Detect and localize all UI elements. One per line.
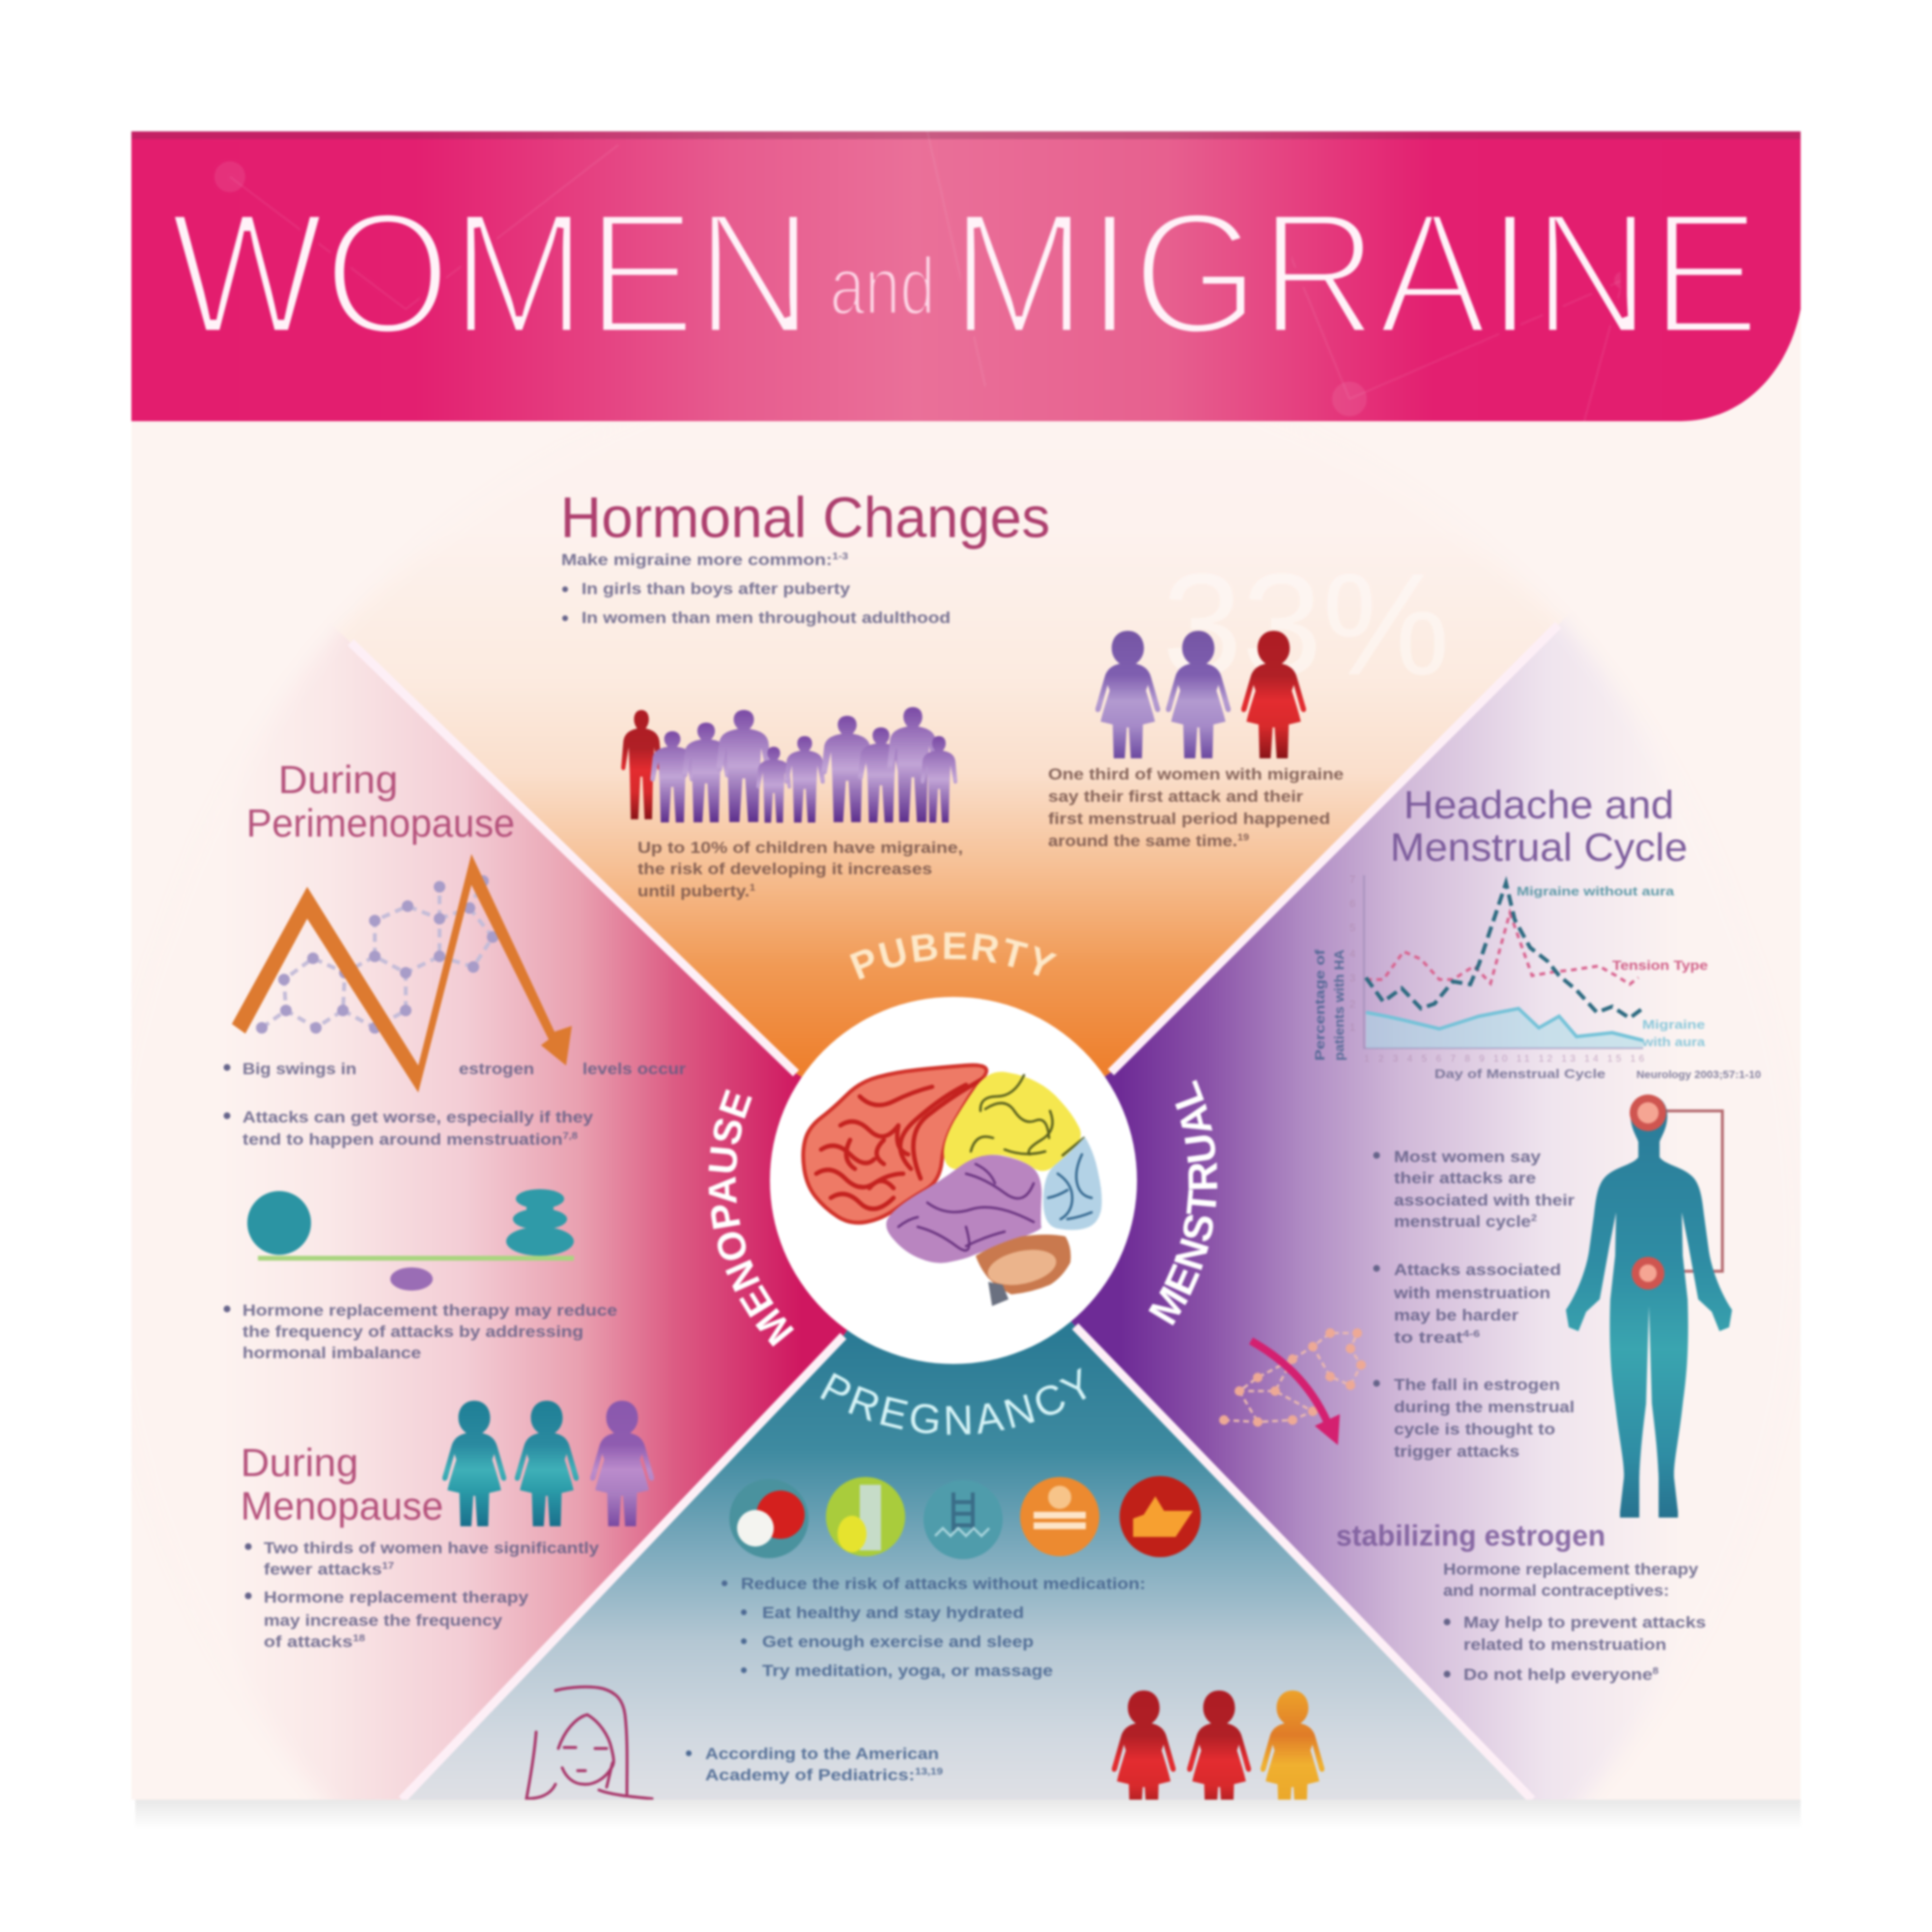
series: migraine with aura xyxy=(1366,1009,1643,1048)
text block: pregnancy advice: Try meditation, yoga, or massage xyxy=(762,1662,1053,1680)
text block: menstrual bullets: The fall in estrogen xyxy=(1394,1376,1560,1394)
text block: children caption xyxy=(638,838,963,900)
text block: stabilizing estrogen details: and normal contraceptives: xyxy=(1443,1581,1669,1600)
text block: menopause bullets: may increase the frequency xyxy=(264,1611,503,1630)
occipital lobe xyxy=(1043,1137,1102,1230)
series label: migraine with aura xyxy=(1641,1017,1706,1049)
series label: migraine with aura: Migraine xyxy=(1642,1017,1705,1032)
pivot xyxy=(390,1267,433,1291)
frontal lobe xyxy=(803,1065,986,1223)
pelvis highlight xyxy=(1632,1257,1664,1290)
panel: pregnancy wedge xyxy=(409,1320,1525,1801)
text block: one third caption: One third of women with migraine xyxy=(1048,765,1344,783)
series: migraine without aura xyxy=(1366,883,1645,1018)
icon: three women, red and orange xyxy=(1112,1690,1324,1818)
banner shape xyxy=(131,131,1801,421)
heading: during menopause: During xyxy=(241,1440,358,1485)
series: tension type xyxy=(1366,913,1638,984)
series label: tension type: Tension Type xyxy=(1612,957,1708,973)
y axis ticks: 4 xyxy=(1350,949,1355,960)
heading: during perimenopause: Perimenopause xyxy=(246,801,515,845)
text block: one third caption: first menstrual period happened xyxy=(1048,810,1330,828)
text block: menopause bullets: 18 xyxy=(353,1634,366,1644)
text block: menopause bullets: 17 xyxy=(382,1561,394,1572)
text block: stabilizing estrogen details xyxy=(1443,1560,1706,1684)
text block: stabilizing estrogen details: May help to prevent attacks xyxy=(1463,1613,1706,1632)
text block: menopause bullets: Hormone replacement therapy xyxy=(264,1588,529,1606)
heading: headache and menstrual cycle: Headache and xyxy=(1404,782,1674,827)
heading: headache and menstrual cycle: Menstrual Cycle xyxy=(1390,825,1688,869)
text block: menstrual bullets: menstrual cycle xyxy=(1394,1212,1519,1231)
axes xyxy=(1364,875,1643,1048)
icon: falling estrogen molecule and arrow xyxy=(1219,1328,1366,1445)
text block: menopause bullets: Two thirds of women have significantly xyxy=(264,1539,600,1557)
connector between head and pelvis xyxy=(1663,1111,1722,1271)
balance line xyxy=(258,1256,574,1261)
heading: stabilizing estrogen: stabilizing estrogen xyxy=(1336,1519,1605,1552)
text block: perimenopause bullets: estrogen xyxy=(459,1060,534,1078)
text block: children caption: 1 xyxy=(750,883,755,894)
y axis ticks: 1 xyxy=(1350,1022,1355,1034)
x axis title: Day of Menstrual Cycle xyxy=(1435,1066,1605,1081)
text block: one third caption: around the same time. xyxy=(1048,832,1222,850)
text block: hormonal changes list: In girls than boys after puberty xyxy=(582,580,851,598)
text block: stabilizing estrogen details: Do not help everyone xyxy=(1463,1665,1631,1684)
big faint statistic: 33% xyxy=(1162,543,1450,705)
text block: pregnancy advice xyxy=(722,1575,1146,1680)
y axis label: patients with HA xyxy=(1331,950,1347,1061)
label: menstrual: MENSTRUAL xyxy=(1148,1078,1219,1327)
text block: children caption: the risk of developing it increases xyxy=(638,860,932,878)
y axis ticks: 2 xyxy=(1350,999,1355,1010)
text block: menopause bullets: fewer attacks xyxy=(264,1560,368,1578)
text block: one third caption: say their first attack and their xyxy=(1048,787,1303,806)
chart: headache by day of cycle xyxy=(1312,874,1761,1081)
series label: migraine without aura: Migraine without aura xyxy=(1517,884,1675,898)
heading: headache and menstrual cycle xyxy=(1390,782,1688,869)
text block: menstrual bullets: Most women say xyxy=(1394,1148,1542,1166)
heading: during perimenopause: During xyxy=(278,757,398,802)
y axis ticks: 3 xyxy=(1350,973,1355,984)
text block: menstrual bullets: with menstruation xyxy=(1393,1284,1550,1302)
icon: swimming pool xyxy=(923,1480,1003,1559)
text block: menstrual bullets: 2 xyxy=(1531,1213,1537,1224)
text block: one third caption xyxy=(1048,765,1344,850)
sphere xyxy=(247,1191,311,1255)
illustration: colored brain xyxy=(803,1065,1102,1306)
heading: during menopause xyxy=(241,1440,443,1528)
poster background xyxy=(131,318,1801,1800)
text block: perimenopause bullets xyxy=(224,1060,686,1149)
text block: American Academy of Pediatrics xyxy=(686,1745,943,1784)
text block: stabilizing estrogen details: Hormone replacement therapy xyxy=(1443,1560,1699,1578)
icon row: lifestyle advice xyxy=(729,1476,1201,1559)
y axis label xyxy=(1312,950,1347,1061)
body silhouette xyxy=(1566,1095,1732,1518)
header banner xyxy=(131,131,1801,421)
icon: three women, one third highlighted xyxy=(1095,631,1306,758)
icon: massage hand xyxy=(1120,1476,1201,1557)
panel: menopause wedge xyxy=(292,634,848,1801)
text block: children caption: until puberty. xyxy=(638,882,740,900)
parietal lobe xyxy=(944,1072,1084,1171)
text block: hormone therapy bullet xyxy=(224,1301,617,1362)
text block: stabilizing estrogen details: related to menstruation xyxy=(1463,1635,1666,1654)
text block: menstrual bullets: associated with their xyxy=(1394,1191,1575,1209)
title: WOMEN xyxy=(170,177,813,371)
icon: estrogen molecule xyxy=(256,875,498,1034)
text block: pregnancy advice: Reduce the risk of attacks without medication: xyxy=(741,1575,1146,1593)
series label: migraine with aura: with aura xyxy=(1641,1035,1706,1049)
poster xyxy=(129,129,1803,1802)
title xyxy=(174,213,1752,334)
icon: hormone balance scale xyxy=(247,1189,574,1291)
temporal lobe xyxy=(886,1155,1041,1263)
label: puberty: PUBERTY xyxy=(848,931,1058,980)
text block: perimenopause bullets: Attacks can get worse, especially if they xyxy=(242,1108,594,1126)
text block: perimenopause bullets: Big swings in xyxy=(242,1060,356,1078)
text block: menstrual bullets: during the menstrual xyxy=(1394,1398,1575,1416)
label: menopause: MENOPAUSE xyxy=(707,1088,796,1349)
source note: Neurology 2003;57:1-10 xyxy=(1636,1069,1761,1081)
text block: stabilizing estrogen details: 8 xyxy=(1653,1666,1659,1677)
text block: American Academy of Pediatrics: 13,19 xyxy=(915,1767,943,1777)
y axis ticks: 5 xyxy=(1350,923,1355,934)
text block: menstrual bullets: cycle is thought to xyxy=(1394,1420,1555,1438)
text block: perimenopause bullets: levels occur xyxy=(582,1060,686,1078)
text block: hormonal changes list: 1-3 xyxy=(832,552,849,562)
text block: pregnancy advice: Get enough exercise and sleep xyxy=(762,1633,1034,1651)
y axis ticks: 6 xyxy=(1350,898,1355,910)
illustration: human body with head and pelvis highlighted xyxy=(1566,1094,1732,1518)
panel: puberty wedge xyxy=(342,583,1553,1078)
head highlight xyxy=(1630,1094,1666,1131)
cerebellum xyxy=(976,1235,1070,1294)
arrow xyxy=(1251,1341,1340,1445)
center hub circle xyxy=(770,997,1137,1364)
title: MIGRAINE xyxy=(951,177,1760,371)
molecule xyxy=(1219,1328,1366,1427)
title: and xyxy=(830,241,935,331)
text block: menstrual bullets xyxy=(1374,1148,1575,1461)
text block: hormone therapy bullet: the frequency of attacks by addressing xyxy=(242,1322,583,1341)
y axis ticks xyxy=(1350,874,1355,1034)
text block: perimenopause bullets: tend to happen around menstruation xyxy=(242,1130,529,1149)
text block: menstrual bullets: 4-6 xyxy=(1463,1329,1481,1340)
text block: menstrual bullets: may be harder xyxy=(1394,1306,1519,1324)
text block: menopause bullets xyxy=(245,1539,600,1651)
text block: American Academy of Pediatrics: According to the American xyxy=(705,1745,939,1763)
x axis ticks: 1 2 3 4 5 6 7 8 9 10 11 12 13 14 15 16 xyxy=(1364,1054,1644,1065)
text block: hormonal changes list xyxy=(561,551,951,627)
text block: menstrual bullets: their attacks are xyxy=(1394,1169,1536,1187)
text block: American Academy of Pediatrics: Academy of Pediatrics: xyxy=(705,1766,887,1784)
brain stem xyxy=(988,1282,1009,1306)
text block: menstrual bullets: trigger attacks xyxy=(1394,1442,1520,1461)
text block: pregnancy advice: Eat healthy and stay hydrated xyxy=(762,1604,1024,1622)
icon: meditation xyxy=(1020,1477,1099,1556)
panel: menstrual wedge xyxy=(1070,625,1617,1800)
text block: one third caption: 19 xyxy=(1237,833,1249,843)
heading: during menopause: Menopause xyxy=(241,1484,443,1528)
text block: perimenopause bullets: 7,8 xyxy=(562,1131,578,1142)
stacked weight xyxy=(506,1189,574,1256)
y axis label: Percentage of xyxy=(1312,950,1327,1061)
icon: apple xyxy=(729,1479,809,1558)
text block: menopause bullets: of attacks xyxy=(264,1633,340,1651)
text block: hormonal changes list: Make migraine more common: xyxy=(561,551,799,569)
heading: during perimenopause xyxy=(246,757,515,845)
icon: crowd of children xyxy=(621,707,957,823)
text block: menstrual bullets: to treat xyxy=(1394,1328,1450,1347)
page shadow below poster xyxy=(135,1800,1801,1829)
text block: hormone therapy bullet: Hormone replacement therapy may reduce xyxy=(242,1301,617,1320)
heading: hormonal changes: Hormonal Changes xyxy=(560,486,1050,550)
text block: children caption: Up to 10% of children have migraine, xyxy=(638,838,963,857)
icon: woman's face line art xyxy=(526,1687,652,1799)
icon: water and lemon xyxy=(826,1477,905,1556)
label: pregnancy: PREGNANCY xyxy=(819,1367,1088,1436)
text block: hormonal changes list: In women than men throughout adulthood xyxy=(582,609,951,627)
text block: hormone therapy bullet: hormonal imbalance xyxy=(242,1344,421,1362)
chart: estrogen swings zigzag arrow xyxy=(232,854,572,1093)
y axis ticks: 7 xyxy=(1350,874,1355,886)
icon: three women, two thirds highlighted xyxy=(442,1401,654,1526)
text block: menstrual bullets: Attacks associated xyxy=(1394,1261,1561,1279)
